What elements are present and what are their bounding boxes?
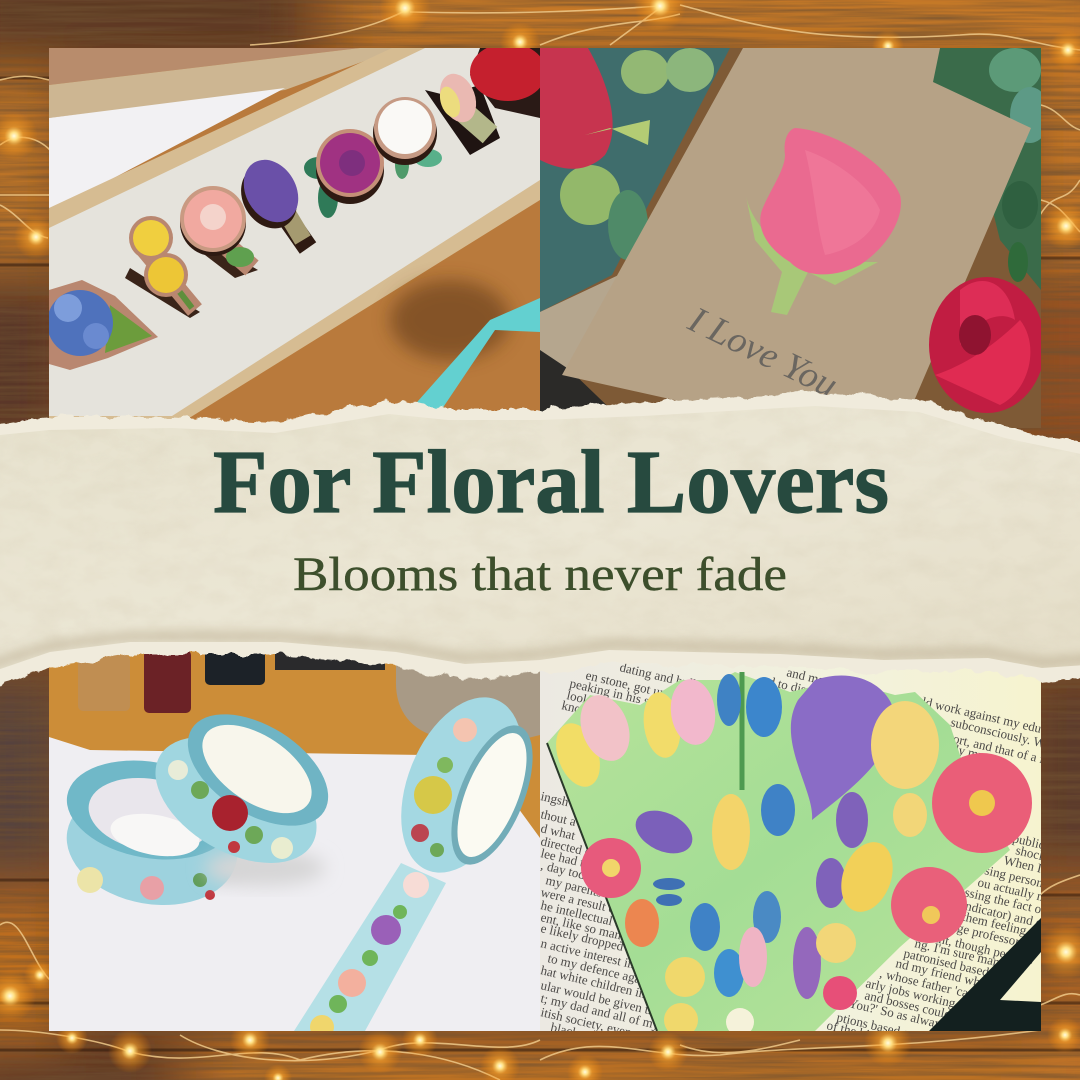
pin: daffodils: [125, 216, 200, 318]
open book printed text: en stone, got up and s: [584, 667, 697, 707]
glasses: [929, 918, 1041, 1031]
pin: pink rose: [180, 186, 258, 278]
open book printed text: ou actually made: [976, 874, 1066, 909]
open book printed text: public s: [1011, 830, 1054, 854]
tape roll: right: [401, 697, 533, 873]
pin: white flower: [373, 97, 442, 179]
open book printed text: port, and that of a few ra: [945, 729, 1074, 773]
open book printed text: t; my dad and all of my uncle: [539, 990, 692, 1039]
handwriting greeting: I Love You: [681, 299, 844, 406]
teal envelope with leaves: [540, 48, 730, 428]
photo: wooden flower pins in box: [47, 43, 546, 428]
open book printed text: and bosses could not: [863, 987, 972, 1026]
open book printed text: were a result of h: [539, 884, 631, 919]
open book printed text: uld work against my educationa: [914, 692, 1080, 744]
open book printed text: arly jobs working in: [864, 975, 971, 1014]
red paper rose: [929, 277, 1045, 413]
bookmark fan: [547, 672, 1010, 1031]
open book printed text: directed e: [539, 833, 593, 859]
open book printed text: thout a: [539, 806, 578, 829]
pin: tulip: [425, 69, 500, 155]
open book printed text: ingsh: [539, 788, 571, 809]
box lid and white surface: [49, 48, 400, 212]
ribbon: [410, 298, 540, 412]
pin: purple peony: [304, 129, 384, 218]
dotted notebook page: [49, 737, 540, 1031]
open book printed text: nd my friend who is: [894, 955, 1000, 993]
open book printed text: he intellectual eq: [539, 897, 630, 932]
torn paper banner: [0, 392, 1080, 692]
open book printed text: shocked: [1014, 842, 1060, 867]
open book printed text: You?' So as always th: [847, 995, 961, 1035]
open book printed text: bridge professor of my: [935, 915, 1055, 957]
painted flowers on bookmarks: [548, 672, 1032, 1037]
open book printed text: ine them feeling the: [942, 904, 1047, 942]
open book printed text: ng. I'm sure many nor: [913, 935, 1028, 976]
photo: I Love You card: [540, 48, 1050, 428]
open book printed text: hat white children in gen: [539, 962, 669, 1006]
open book printed text: know: [560, 697, 592, 719]
pin: red tulip: [470, 48, 540, 118]
open book printed text: ptions based on cl: [835, 1009, 930, 1045]
open book printed text: s indicator) and dres: [952, 895, 1059, 934]
open book printed text: [539, 659, 1080, 1045]
background items on desk: [78, 650, 540, 745]
photo: painted floral bookmarks on book: [540, 662, 1041, 1031]
green leaves backdrop: [930, 48, 1050, 290]
open book printed text: ically my: [935, 737, 987, 763]
open book printed text: patronised based on: [902, 945, 1007, 983]
pink rose cutout: [746, 128, 901, 315]
open book printed text: d what: [539, 820, 577, 843]
open book printed text: itish society, even son: [539, 1004, 654, 1045]
kraft card: [562, 48, 1031, 428]
open book printed text: lee had to: [539, 845, 592, 871]
open book printed text: point, though perhaps: [921, 927, 1035, 967]
open book printed text: , day today a: [539, 857, 608, 887]
tape roll: lower left: [66, 760, 238, 905]
open book printed text: When I'm: [1002, 852, 1055, 878]
open book printed text: and me: [785, 664, 826, 688]
felt-lined box: [49, 48, 540, 420]
open book printed text: of the bi: [825, 1017, 871, 1042]
tape roll: centre: [156, 714, 328, 891]
open book printed text: ent, like so many: [539, 909, 630, 944]
open book printed text: ssing the fact of it,: [963, 884, 1061, 921]
open book printed text: sing person fe: [983, 862, 1058, 893]
open book printed text: , whose father 'came: [878, 965, 985, 1004]
open book printed text: n active interest in my: [539, 935, 656, 976]
title: For Floral Lovers: [213, 433, 889, 532]
tape strip: [294, 863, 446, 1039]
subtitle: Blooms that never fade: [293, 548, 787, 601]
photo: floral washi tape: [49, 650, 549, 1039]
open book printed text: ed to dism: [761, 672, 817, 699]
open book printed text: dating and bulb: [618, 659, 701, 692]
ribbon shadow on table: [390, 280, 510, 360]
open book printed text: my parents to: [544, 872, 617, 903]
pin: crocus: [230, 150, 309, 248]
open book printed text: black: [549, 1019, 581, 1040]
open book printed text: to my defence agains: [546, 950, 657, 990]
open book printed text: ular would be given the ben: [539, 977, 684, 1025]
open book printed text: subconsciously. Were it: [949, 714, 1072, 757]
pin: hydrangea: [47, 280, 158, 370]
open book printed text: look, I'm speaking: [565, 687, 663, 724]
open book printed text: peaking in his sofres: [568, 675, 676, 714]
open book printed text: e likely dropped out: [539, 920, 645, 958]
